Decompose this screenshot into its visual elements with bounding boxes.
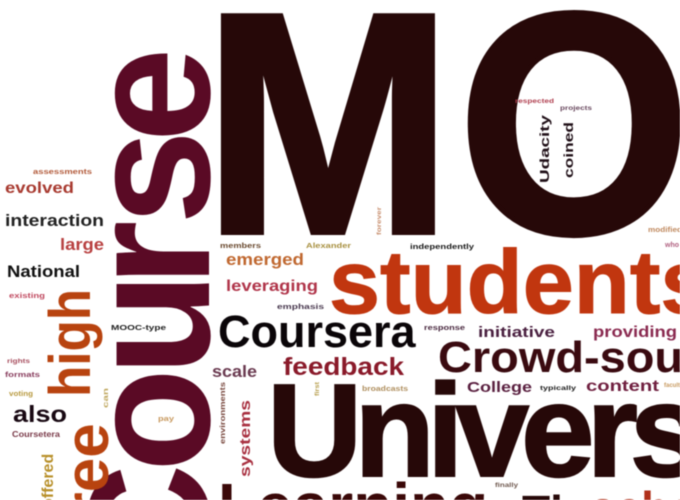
- word: voting: voting: [9, 391, 33, 398]
- word: scale: scale: [212, 362, 257, 381]
- word: respected: respected: [515, 98, 554, 105]
- word: evolved: evolved: [5, 180, 74, 197]
- word: independently: independently: [410, 244, 474, 251]
- word: large: large: [60, 235, 104, 254]
- word: forever (rotated): forever: [376, 206, 383, 235]
- word: who: who: [664, 242, 679, 249]
- word: also: also: [13, 401, 67, 427]
- word: Coursera: Coursera: [218, 306, 417, 357]
- word: assessments: assessments: [33, 169, 92, 176]
- word: Udacity (rotated): Udacity: [537, 114, 552, 183]
- word: feedback: feedback: [283, 353, 404, 381]
- word: finally: finally: [495, 483, 519, 489]
- word: response: response: [424, 325, 465, 332]
- word: systems (rotated): systems: [237, 400, 254, 477]
- word: Coursetera: Coursetera: [12, 430, 61, 439]
- word: rights: rights: [7, 358, 30, 365]
- word: projects: projects: [560, 105, 592, 112]
- word: coined (rotated): coined: [561, 122, 576, 178]
- word: existing: existing: [9, 293, 45, 300]
- word: emerged: emerged: [226, 250, 304, 269]
- word: content: content: [586, 378, 660, 395]
- word: typically: typically: [540, 386, 577, 392]
- word: interaction: interaction: [5, 211, 104, 230]
- word: initiative: initiative: [478, 324, 555, 341]
- word: emphasis: emphasis: [277, 304, 324, 311]
- word: can (rotated): can: [103, 388, 110, 408]
- word: National: National: [7, 262, 80, 281]
- word: first (rotated): first: [314, 381, 321, 396]
- word: broadcasts: broadcasts: [362, 386, 408, 393]
- word: College: College: [467, 379, 532, 396]
- word: providing: providing: [593, 324, 677, 341]
- word: MOOC-type: MOOC-type: [111, 325, 166, 332]
- word: formats: formats: [5, 372, 40, 379]
- word: high (rotated): high: [38, 289, 103, 397]
- word: leveraging: leveraging: [226, 278, 318, 295]
- word: pay: pay: [158, 416, 174, 423]
- word: Alexander: Alexander: [306, 243, 351, 250]
- word: modified: modified: [648, 227, 680, 234]
- word: members: members: [220, 243, 261, 250]
- word: environments (rotated): environments: [218, 382, 227, 444]
